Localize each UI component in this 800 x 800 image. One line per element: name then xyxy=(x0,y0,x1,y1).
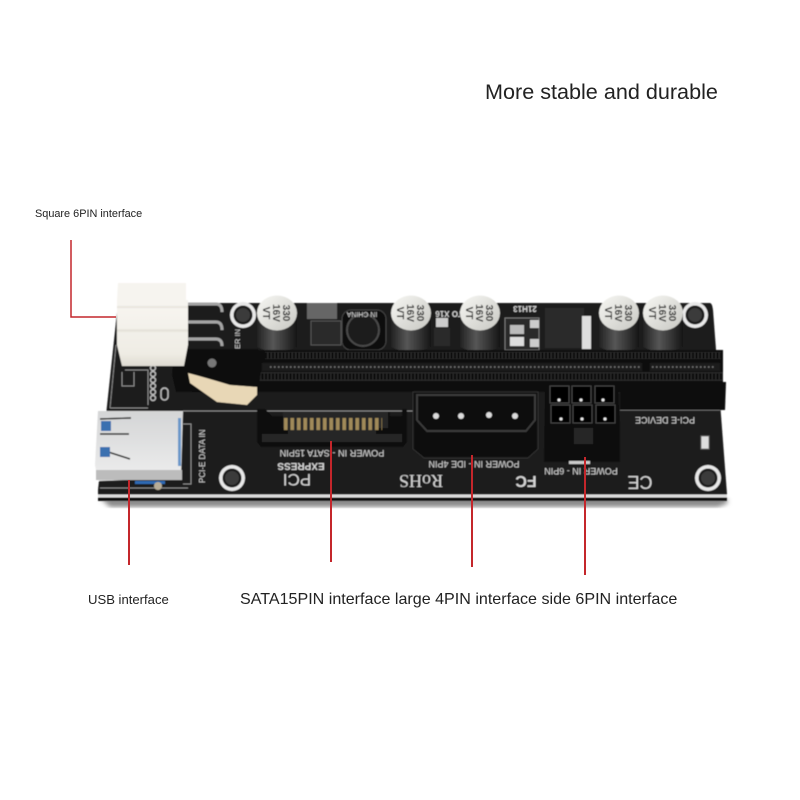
square 6PIN connector xyxy=(117,283,188,366)
circuit traces xyxy=(100,345,720,488)
callout line: side 6PIN xyxy=(584,457,586,575)
callout line: SATA 15PIN xyxy=(330,441,332,562)
LED xyxy=(701,436,709,449)
silkscreen labels: EXPRESS xyxy=(277,460,325,471)
slot latch xyxy=(172,349,262,405)
PCIe slot xyxy=(258,350,726,410)
callout line: large 4PIN xyxy=(471,455,473,567)
silkscreen labels: TO X16 xyxy=(435,309,463,318)
silkscreen labels: 21H13 xyxy=(513,304,537,313)
mounting holes xyxy=(219,302,721,491)
silkscreen labels: POWER IN - IDE 4PIN xyxy=(428,459,520,469)
silkscreen labels: PCI-E DATA IN xyxy=(198,429,207,483)
board white edge xyxy=(98,494,727,498)
label: square 6PIN interface: Square 6PIN interface xyxy=(35,208,142,220)
large 4PIN connector xyxy=(413,392,538,458)
silkscreen labels: PCI-E DEVICE xyxy=(635,415,695,425)
board shadow xyxy=(100,498,728,507)
board PCB xyxy=(98,303,727,500)
silkscreen labels: POWER IN - SATA 15PIN xyxy=(280,448,384,458)
solder pads xyxy=(150,366,168,400)
silkscreen labels: IN CHINA xyxy=(346,310,377,317)
silkscreen labels: POWER IN - 6PIN xyxy=(544,466,618,476)
USB port xyxy=(95,411,183,490)
silkscreen labels: ER IN xyxy=(233,329,242,349)
SATA 15PIN connector xyxy=(257,409,407,447)
title: More stable and durable xyxy=(485,79,718,104)
capacitors xyxy=(257,296,683,352)
callout line: square 6PIN xyxy=(71,240,116,317)
side 6PIN connector xyxy=(544,382,620,464)
square 6PIN pins xyxy=(185,304,222,346)
silkscreen labels xyxy=(198,304,695,492)
label: USB interface: USB interface xyxy=(88,592,169,607)
silkscreen labels: FC xyxy=(515,472,537,489)
silkscreen labels: PCI xyxy=(283,470,311,489)
small components xyxy=(307,303,591,350)
silkscreen labels: CE xyxy=(627,472,653,492)
callout line: USB xyxy=(128,480,130,565)
graphics card riser board xyxy=(95,283,728,507)
label: connector interfaces: SATA15PIN interface large 4PIN interface side 6PIN interface xyxy=(240,590,677,608)
silkscreen labels: RoHS xyxy=(399,471,443,491)
